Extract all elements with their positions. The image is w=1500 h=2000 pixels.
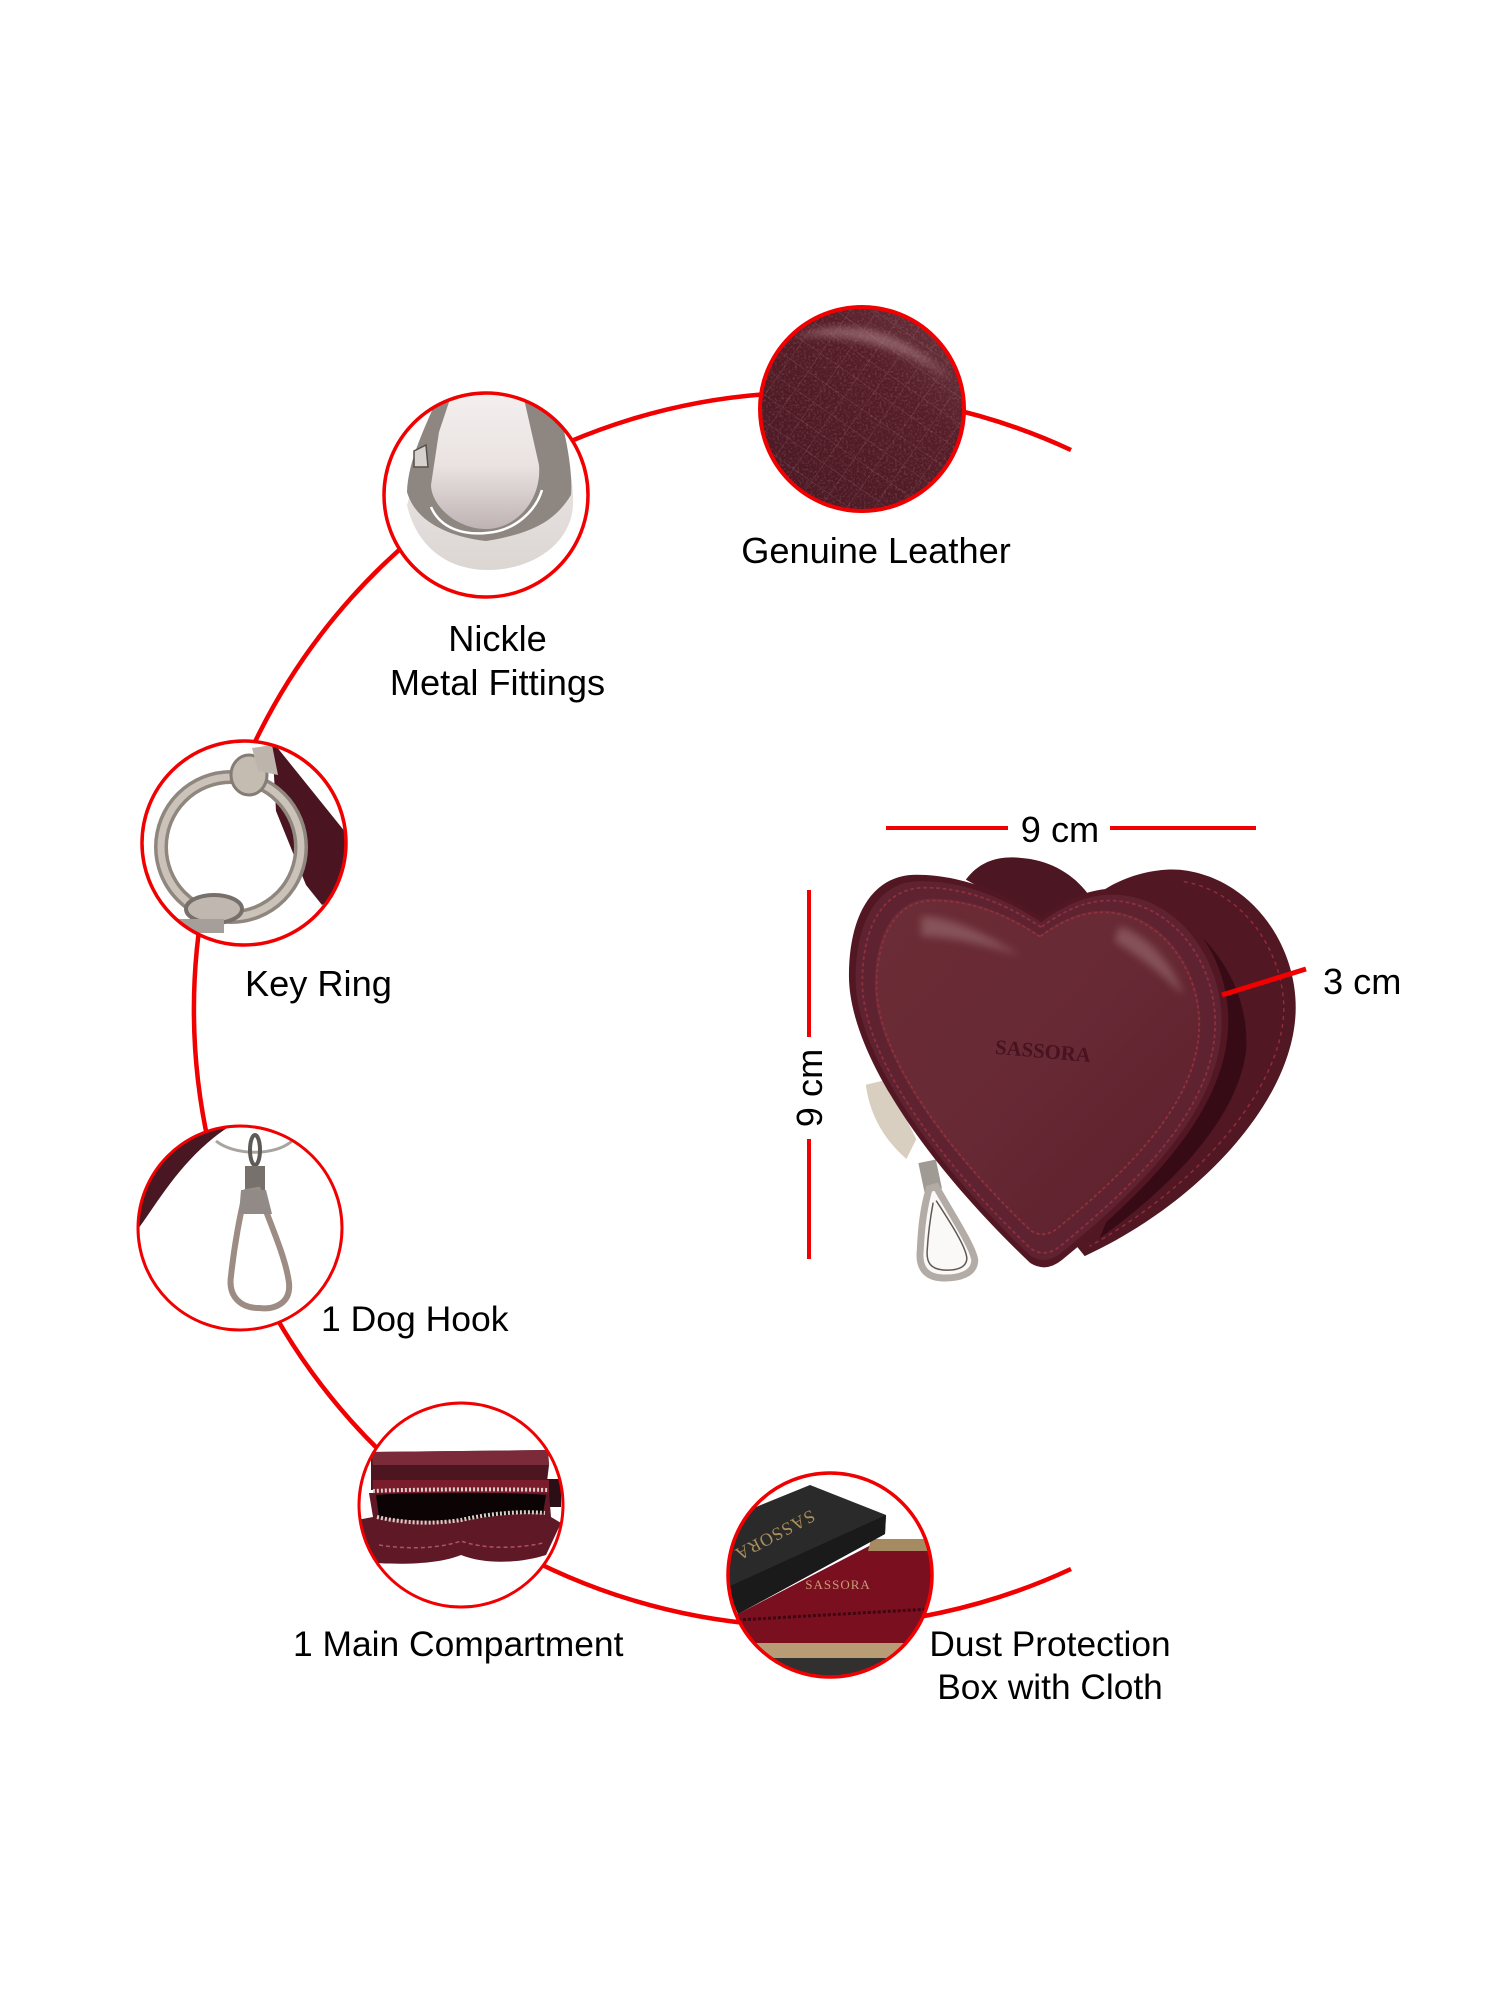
key ring stub xyxy=(866,1080,916,1159)
label: Genuine Leather: Genuine Leather xyxy=(741,530,1011,571)
label: 1 Dog Hook: 1 Dog Hook xyxy=(321,1299,509,1339)
dimension: depth 3 cm xyxy=(1222,961,1401,1002)
front rim xyxy=(856,881,1222,1260)
label: Dust Protection Box with Cloth: Dust Protection xyxy=(929,1625,1171,1664)
brand emboss: SASSORA xyxy=(994,1036,1092,1067)
circle: dog hook xyxy=(130,1118,344,1332)
back right lobe and body xyxy=(1030,869,1296,1256)
dimension: width 9 cm: 9 cm xyxy=(1021,809,1099,850)
back panel shade xyxy=(1100,896,1246,1238)
label: Dust Protection Box with Cloth: Box with Cloth xyxy=(937,1668,1163,1707)
circle: main compartment xyxy=(357,1401,565,1609)
pad stitching xyxy=(877,901,1199,1234)
circle: genuine leather xyxy=(758,305,966,513)
dog hook xyxy=(918,1159,975,1278)
pad xyxy=(875,899,1201,1236)
connecting red arc xyxy=(194,392,1071,1626)
dimension: height 9 cm: 9 cm xyxy=(789,1049,830,1127)
circle: dust protection box xyxy=(726,1471,934,1681)
circle: nickel metal fitting xyxy=(382,390,590,599)
back stitching xyxy=(1090,882,1284,1246)
outer stitching xyxy=(862,888,1215,1253)
circle: key ring xyxy=(140,739,354,947)
circle: dust protection box: SASSORA xyxy=(805,1577,871,1592)
front panel outline xyxy=(849,875,1228,1267)
label: Nickle Metal Fittings: Nickle xyxy=(448,618,547,659)
circle: dust protection box: SASSORA xyxy=(731,1506,818,1565)
label: Key Ring: Key Ring xyxy=(245,963,392,1004)
dimension: depth 3 cm: 3 cm xyxy=(1323,961,1401,1002)
product: heart coin pouch xyxy=(849,857,1296,1278)
back left lobe xyxy=(966,857,1092,926)
label: Nickle Metal Fittings: Metal Fittings xyxy=(390,662,605,703)
highlights xyxy=(921,916,1020,956)
label: 1 Main Compartment: 1 Main Compartment xyxy=(293,1624,624,1664)
